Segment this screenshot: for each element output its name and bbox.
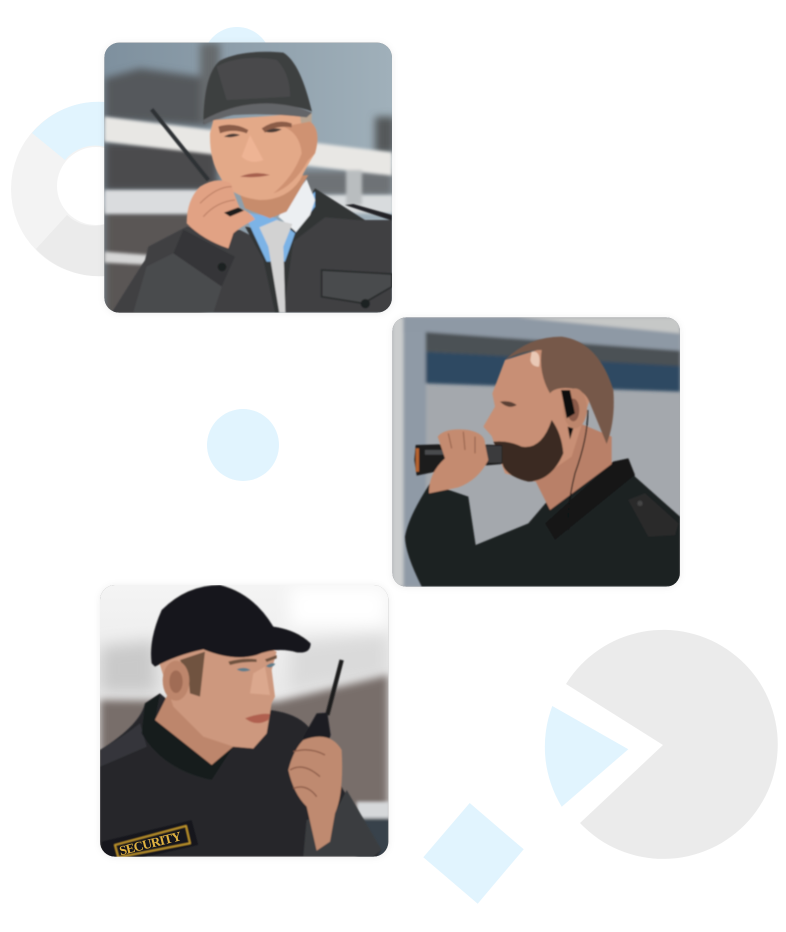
face [483,343,592,482]
beard [493,420,563,482]
antenna [327,660,342,715]
decorative pie chart shape [566,630,778,859]
security patch text: SECURITY [118,828,183,858]
hand [187,180,255,248]
tie [259,220,292,313]
photo: guard in cap with security patch [100,585,390,858]
sleeve [303,790,382,857]
earpiece [561,390,575,439]
ear [563,388,587,428]
neck [154,695,254,766]
hand [288,737,342,851]
hair [505,337,614,444]
decorative diamond [423,803,524,904]
decorative pie wedge [545,706,628,807]
radio [224,207,244,217]
face [210,113,317,200]
photo: guard with radio and tie [104,43,395,317]
decorative middle circle [207,409,279,481]
shirt [243,212,295,262]
radio [304,712,332,739]
hat [203,52,312,124]
pocket [322,270,392,303]
eye [500,401,517,407]
jacket [405,458,680,587]
patch [102,820,198,858]
sleeve [173,229,235,287]
flashlight [414,444,502,476]
jacket [100,693,382,857]
sideburn [180,652,205,697]
face [158,640,277,748]
hand [429,429,488,493]
neck [535,420,612,510]
decorative top circle [203,27,271,95]
antenna [152,109,208,180]
neck [235,175,308,218]
jacket [112,188,392,313]
hat [151,585,311,667]
ear [163,661,189,701]
photo: guard with flashlight [392,317,680,587]
decorative ring [11,102,185,276]
